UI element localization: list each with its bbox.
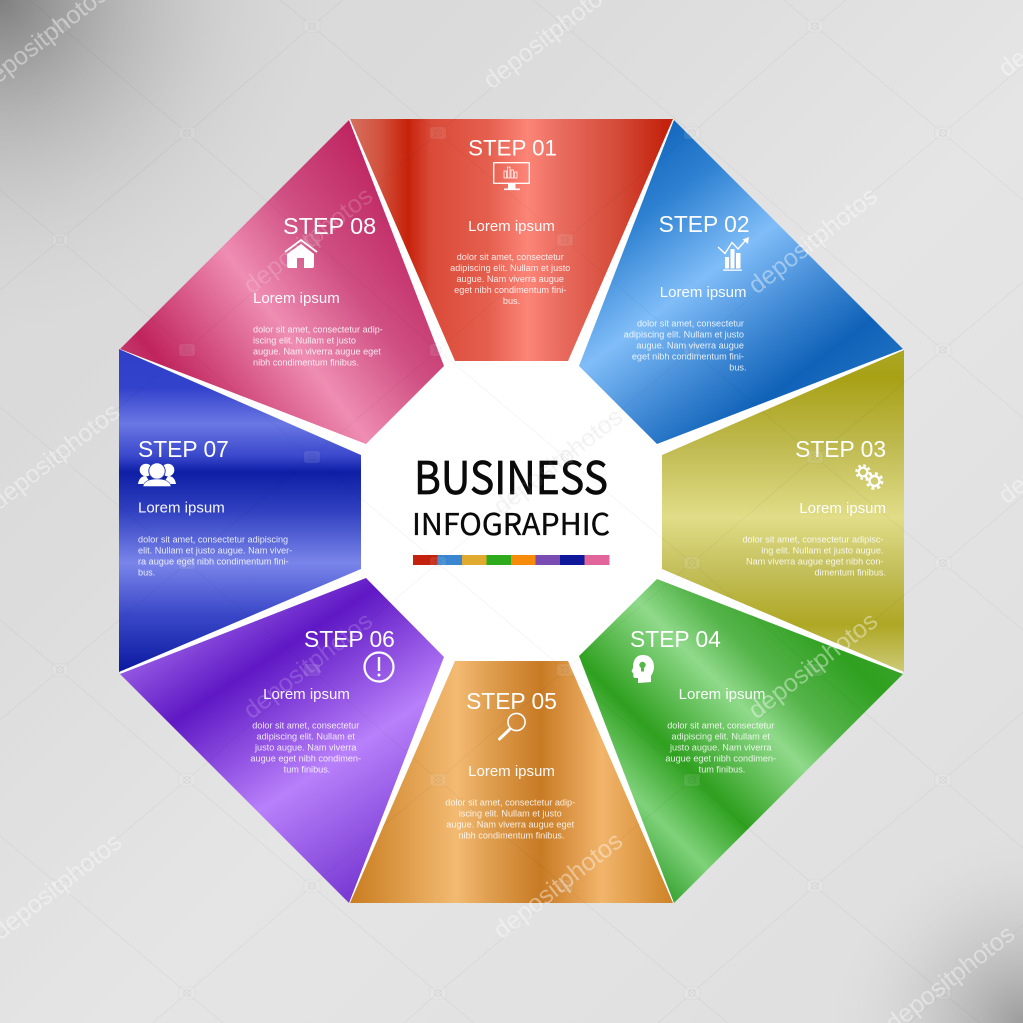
panel: step 08 [120,120,444,444]
panel: step 03 [662,350,904,672]
watermarks: depositphotos [743,607,883,725]
body text: step 05: dolor sit amet, consectetur adip- [445,798,575,808]
watermarks: depositphotos [743,182,883,300]
body text: step 08: iscing elit. Nullam et justo [253,336,356,346]
body text: step 07: ra augue eget nibh condimentum fini- [138,556,289,566]
heading: step 04: STEP 04 [630,626,721,652]
body text: step 03: dimentum finibus. [814,568,886,578]
subheading: step 07: Lorem ipsum [138,500,225,516]
body text: step 01: adipiscing elit. Nullam et justo [450,263,570,273]
body text: step 05: nibh condimentum finibus. [458,830,565,840]
title line: business: BUSINESS [414,442,608,507]
watermarks: depositphotos [488,403,628,521]
subheading: step 01: Lorem ipsum [468,218,555,235]
watermarks: depositphotos [488,827,628,945]
body text: step 02: dolor sit amet, consectetur [637,318,744,328]
heading: step 08: STEP 08 [283,213,376,239]
body text: step 03: dolor sit amet, consectetur adipisc- [742,534,883,544]
body text: step 05: augue. Nam viverra augue eget [446,820,575,830]
heading: step 05: STEP 05 [466,688,557,714]
body text: step 06: augue eget nibh condimen- [250,754,361,764]
icon: people group [138,463,176,486]
icon: magnifier [500,713,525,739]
heading: step 01: STEP 01 [468,136,557,160]
body text: step 04: dolor sit amet, consectetur [667,720,774,730]
subheading: step 06: Lorem ipsum [263,686,350,703]
heading: step 07: STEP 07 [138,436,229,462]
panel: step 02 [579,120,903,444]
body text: step 01: augue. Nam viverra augue [456,274,564,284]
icon: growth chart [718,237,749,271]
panel: step 07 [119,349,361,672]
watermarks: depositphotos [238,182,378,300]
body text: step 08: augue. Nam viverra augue eget [253,346,381,356]
body text: step 01: bus. [503,296,520,306]
body text: step 04: adipiscing elit. Nullam et [672,732,770,742]
body text: step 07: dolor sit amet, consectetur adipiscing [138,534,288,544]
body text: step 07: elit. Nullam et justo augue. Nam viver- [138,546,292,556]
body text: step 07: bus. [138,568,155,578]
color bar [413,555,610,565]
heading: step 03: STEP 03 [795,436,886,462]
title line: infographic: INFOGRAPHIC [412,500,610,544]
icon: gears [856,465,882,489]
center title [412,442,610,565]
subheading: step 08: Lorem ipsum [253,290,340,307]
body text: step 02: adipiscing elit. Nullam et justo [624,330,744,340]
icon: alert circle [364,652,394,682]
subheading: step 02: Lorem ipsum [660,284,746,301]
subheading: step 05: Lorem ipsum [468,763,555,780]
body text: step 01: dolor sit amet, consectetur [457,252,564,262]
body text: step 06: adipiscing elit. Nullam et [257,732,355,742]
body text: step 08: nibh condimentum finibus. [253,358,359,368]
body text: step 04: tum finibus. [699,764,745,774]
subheading: step 03: Lorem ipsum [799,500,886,517]
body text: step 05: iscing elit. Nullam et justo [459,808,562,818]
watermarks: depositphotos [238,607,378,725]
body text: step 02: bus. [729,362,746,372]
body text: step 06: dolor sit amet, consectetur [252,720,359,730]
body text: step 04: justo augue. Nam viverra [669,742,772,752]
icon: monitor chart [494,163,529,190]
body text: step 02: eget nibh condimentum fini- [632,352,744,362]
subheading: step 04: Lorem ipsum [679,686,765,703]
panel: step 01 [350,119,673,361]
body text: step 01: eget nibh condimentum fini- [454,285,566,295]
icon: house [285,240,317,268]
body text: step 04: augue eget nibh condimen- [665,754,776,764]
white octagon backing [120,119,903,903]
panel: step 05 [350,661,673,903]
body text: step 06: tum finibus. [284,764,330,774]
icon: head with bulb [632,655,654,683]
panel: step 06 [120,578,444,903]
panel: step 04 [579,579,903,903]
body text: step 08: dolor sit amet, consectetur adip- [253,324,383,334]
body text: step 03: Nam viverra augue eget nibh con- [746,556,883,566]
body text: step 02: augue. Nam viverra augue [636,340,744,350]
heading: step 06: STEP 06 [304,626,395,652]
body text: step 03: ing elit. Nullam et justo augue. [761,546,883,556]
body text: step 06: justo augue. Nam viverra [254,742,357,752]
heading: step 02: STEP 02 [659,211,750,237]
